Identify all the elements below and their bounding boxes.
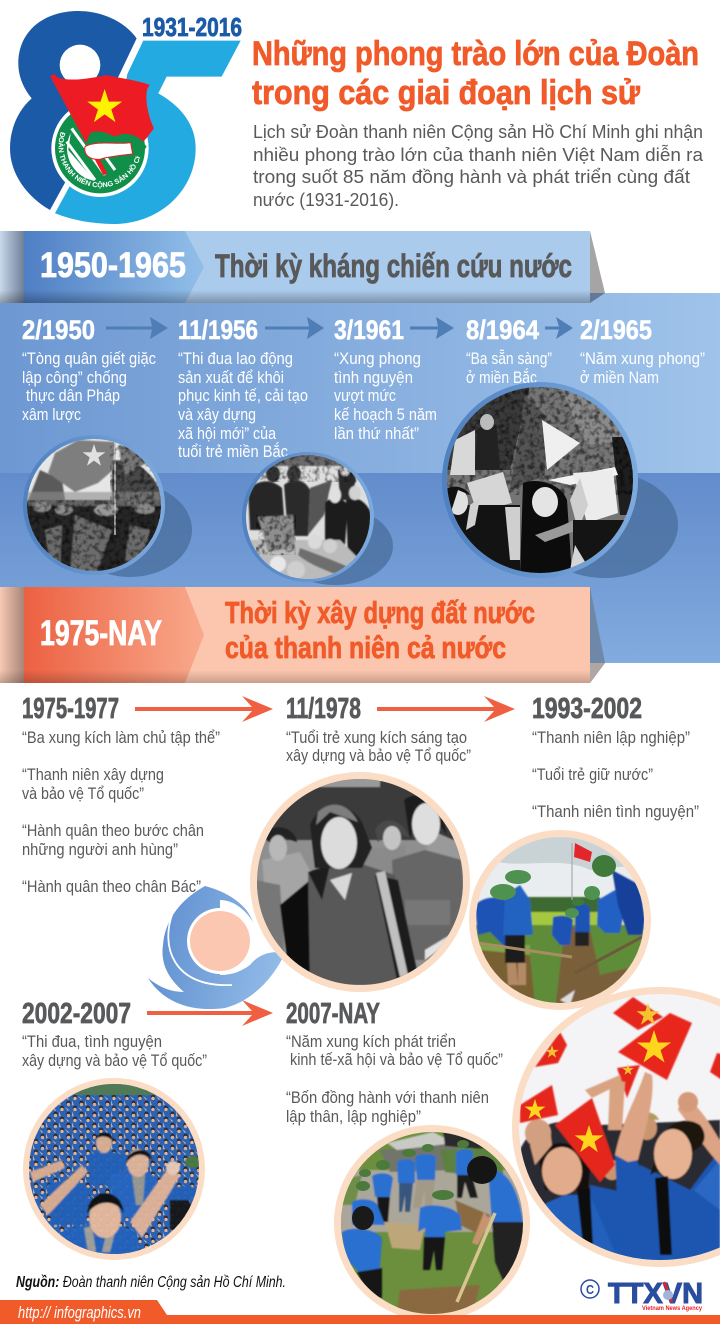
intro text: nhiều phong trào lớn của thanh niên Việt Nam diễn ra xyxy=(253,144,704,165)
milestone 8/1964: ở miền Bắc xyxy=(466,368,537,387)
milestone 1975-1977: “Hành quân theo chân Bác” xyxy=(22,878,201,896)
logo flag xyxy=(50,74,154,175)
milestone 3/1961: tình nguyện xyxy=(334,369,413,387)
banner years: 1950-1965 xyxy=(40,246,186,285)
intro text xyxy=(253,121,704,210)
timeline arrows: second period xyxy=(135,696,515,1026)
milestone 1975-1977: và bảo vệ Tổ quốc” xyxy=(22,785,144,803)
banner heading xyxy=(225,595,535,665)
milestone 3/1961: vượt mức xyxy=(334,387,396,405)
logo: 85 years emblem xyxy=(10,11,241,224)
milestone 1975-1977: “Ba xung kích làm chủ tập thể” xyxy=(22,729,220,747)
milestone 2/1950: 2/1950 xyxy=(22,315,95,345)
milestone 1993-2002: “Thanh niên tình nguyện” xyxy=(532,803,699,821)
milestone 2/1965: 2/1965 xyxy=(580,315,652,345)
milestone 2/1950 xyxy=(22,315,156,424)
logo years 1931-2016: 1931-2016 xyxy=(142,12,242,42)
milestone 2007-NAY xyxy=(286,998,503,1126)
logo: TTXVN agency: TTXVN xyxy=(608,1278,703,1310)
milestone 2/1950: lập công” chống xyxy=(22,369,127,387)
milestone 8/1964 xyxy=(466,315,552,387)
milestone 11/1956: 11/1956 xyxy=(178,315,258,345)
milestone 1975-1977: “Thanh niên xây dựng xyxy=(22,766,164,784)
logo emblem circle xyxy=(51,111,149,197)
milestone 2007-NAY: kinh tế-xã hội và bảo vệ Tổ quốc” xyxy=(290,1051,503,1069)
milestone 2007-NAY: lập thân, lập nghiệp” xyxy=(286,1108,421,1126)
milestone 2002-2007 xyxy=(22,998,207,1070)
photo: 2007-now field work xyxy=(334,1125,530,1324)
logo: TTXVN agency: C xyxy=(586,1282,595,1297)
milestone 2007-NAY: “Bốn đồng hành với thanh niên xyxy=(286,1089,489,1107)
milestone 2007-NAY: 2007-NAY xyxy=(286,998,380,1030)
banner heading: Thời kỳ xây dựng đất nước xyxy=(225,595,535,630)
icon: swirl motif xyxy=(148,886,285,1009)
milestone 1975-1977: những người anh hùng” xyxy=(22,841,178,859)
milestone 1993-2002: “Thanh niên lập nghiệp” xyxy=(532,729,690,747)
milestone 1993-2002 xyxy=(532,693,699,821)
banner heading: của thanh niên cả nước xyxy=(225,630,506,665)
milestone 1993-2002: “Tuổi trẻ giữ nước” xyxy=(532,766,653,784)
milestone 11/1978 xyxy=(286,693,471,765)
milestone 2002-2007: xây dựng và bảo vệ Tổ quốc” xyxy=(22,1052,207,1070)
logo numeral 8 counter xyxy=(60,45,100,85)
milestone 2/1965: ở miền Nam xyxy=(580,369,659,387)
milestone 2002-2007: 2002-2007 xyxy=(22,998,131,1030)
milestone 1975-1977 xyxy=(22,693,220,896)
footer bar xyxy=(0,1300,720,1324)
milestone 11/1956: xã hội mới” của xyxy=(178,425,277,443)
milestone 11/1956: tuổi trẻ miền Bắc xyxy=(178,442,288,461)
milestone 1975-1977: 1975-1977 xyxy=(22,693,119,725)
photo: girls carrying boxes xyxy=(442,382,640,578)
milestone 11/1956: sản xuất để khôi xyxy=(178,369,284,387)
milestone 2/1950: “Tòng quân giết giặc xyxy=(22,350,156,368)
milestone 8/1964: 8/1964 xyxy=(466,315,539,345)
milestone 11/1956: phục kinh tế, cải tạo xyxy=(178,387,308,405)
logo numeral 8 xyxy=(10,11,137,210)
milestone 2/1950: thực dân Pháp xyxy=(26,387,120,405)
milestone 2/1950: xâm lược xyxy=(22,406,81,424)
milestone 3/1961: “Xung phong xyxy=(334,350,421,368)
logo numeral 5 xyxy=(55,41,241,224)
logo: TTXVN agency: Vietnam News Agency xyxy=(642,1305,702,1312)
milestone 1975-1977: “Hành quân theo bước chân xyxy=(22,822,204,840)
milestone 1993-2002: 1993-2002 xyxy=(532,693,642,725)
milestone 2007-NAY: “Năm xung kích phát triển xyxy=(286,1033,456,1051)
footer url: http:// infographics.vn xyxy=(18,1303,141,1322)
milestone 2/1965 xyxy=(580,315,705,387)
panel: 1950-1965 background xyxy=(0,293,720,663)
title: trong các giai đoạn lịch sử xyxy=(252,74,640,112)
banner heading: Thời kỳ kháng chiến cứu nước xyxy=(215,248,572,284)
photo: 1978 young volunteers xyxy=(250,772,470,992)
source note: Nguồn: Đoàn thanh niên Cộng sản Hồ Chí Minh. xyxy=(16,1274,286,1291)
milestone 11/1956: và xây dựng xyxy=(178,406,256,424)
intro text: Lịch sử Đoàn thanh niên Cộng sản Hồ Chí Minh ghi nhận xyxy=(253,121,703,142)
milestone 11/1956: “Thi đua lao động xyxy=(178,350,293,368)
banner years: 1975-NAY xyxy=(40,614,162,653)
timeline arrows: first period xyxy=(106,317,573,339)
photo: cheering crowd xyxy=(23,1078,205,1260)
photo: soldiers with flag xyxy=(20,435,170,576)
photo shadows xyxy=(68,472,678,585)
photo: youth with flags xyxy=(512,987,720,1270)
back flags xyxy=(535,997,720,1098)
milestone 3/1961 xyxy=(334,315,437,443)
milestone 11/1978: “Tuổi trẻ xung kích sáng tạo xyxy=(286,729,467,747)
milestone 11/1956 xyxy=(178,315,308,461)
milestone 3/1961: 3/1961 xyxy=(334,315,404,345)
intro text: nước (1931-2016). xyxy=(253,189,399,210)
milestone 2/1965: “Năm xung phong” xyxy=(580,350,705,368)
banner: 1950-1965 xyxy=(0,231,605,303)
milestone 3/1961: lần thứ nhất” xyxy=(334,425,419,443)
banner: 1975-NAY xyxy=(0,587,605,683)
photo: market group xyxy=(240,450,375,585)
milestone 3/1961: kế hoạch 5 năm xyxy=(334,406,437,424)
title xyxy=(252,35,699,112)
intro text: trong suốt 85 năm đồng hành và phát triển cùng đất xyxy=(253,166,690,187)
milestone 2002-2007: “Thi đua, tình nguyện xyxy=(22,1033,162,1051)
milestone 11/1978: xây dựng và bảo vệ Tổ quốc” xyxy=(286,747,471,765)
milestone 11/1978: 11/1978 xyxy=(286,693,361,725)
photo: 1993-2002 planting xyxy=(469,830,651,1010)
milestone 8/1964: “Ba sẵn sàng” xyxy=(466,349,552,368)
